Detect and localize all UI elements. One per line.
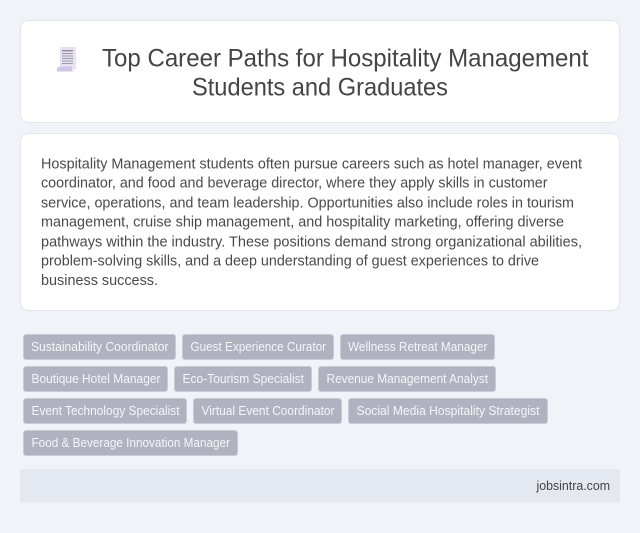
text block: description: coordinator, and food and beverage director, where they apply skills in customer <box>41 175 548 191</box>
tag: Revenue Management Analyst: Revenue Management Analyst <box>326 372 488 386</box>
panel: header <box>20 20 620 122</box>
tag: Sustainability Coordinator: Sustainability Coordinator <box>31 340 168 354</box>
tag list <box>24 334 548 456</box>
text block: description: Hospitality Management students often pursue careers such as hotel manager, event <box>41 156 582 172</box>
tag: Wellness Retreat Manager <box>340 334 494 360</box>
tag: Eco-Tourism Specialist: Eco-Tourism Specialist <box>182 372 304 386</box>
tag: Guest Experience Curator: Guest Experience Curator <box>190 340 326 354</box>
icon: receipt scroll <box>57 47 76 72</box>
tag: Boutique Hotel Manager <box>24 366 168 392</box>
title <box>102 45 589 102</box>
text block: description: business success. <box>41 273 158 289</box>
panel: description <box>20 134 620 310</box>
text block: description <box>41 156 582 289</box>
footer: jobsintra.com <box>536 479 610 493</box>
text block: description: problem-solving skills, and a deep understanding of guest experiences to drive <box>41 253 539 269</box>
tag: Revenue Management Analyst <box>318 366 496 392</box>
tag: Guest Experience Curator <box>182 334 334 360</box>
tag: Event Technology Specialist <box>24 398 186 424</box>
tag: Social Media Hospitality Strategist <box>348 398 548 424</box>
tag: Food & Beverage Innovation Manager: Food & Beverage Innovation Manager <box>32 436 230 450</box>
tag: Virtual Event Coordinator <box>194 398 342 424</box>
tag: Social Media Hospitality Strategist: Social Media Hospitality Strategist <box>356 404 540 418</box>
text block: description: service, operations, and team leadership. Opportunities also include roles in tourism <box>41 195 574 211</box>
tag: Virtual Event Coordinator: Virtual Event Coordinator <box>202 404 334 418</box>
tag: Boutique Hotel Manager: Boutique Hotel Manager <box>32 372 160 386</box>
tag: Food & Beverage Innovation Manager <box>24 430 238 456</box>
text block: description: management, cruise ship management, and hospitality marketing, offering diverse <box>41 215 564 231</box>
title: Students and Graduates <box>192 74 448 102</box>
text block: description: pathways within the industry. These positions demand strong organizational abilities, <box>41 234 582 250</box>
footer <box>20 469 620 502</box>
tag: Wellness Retreat Manager: Wellness Retreat Manager <box>348 340 488 354</box>
tag: Event Technology Specialist: Event Technology Specialist <box>32 404 180 418</box>
tag: Sustainability Coordinator <box>24 334 176 360</box>
tag: Eco-Tourism Specialist <box>174 366 312 392</box>
title: Top Career Paths for Hospitality Management <box>102 45 589 73</box>
